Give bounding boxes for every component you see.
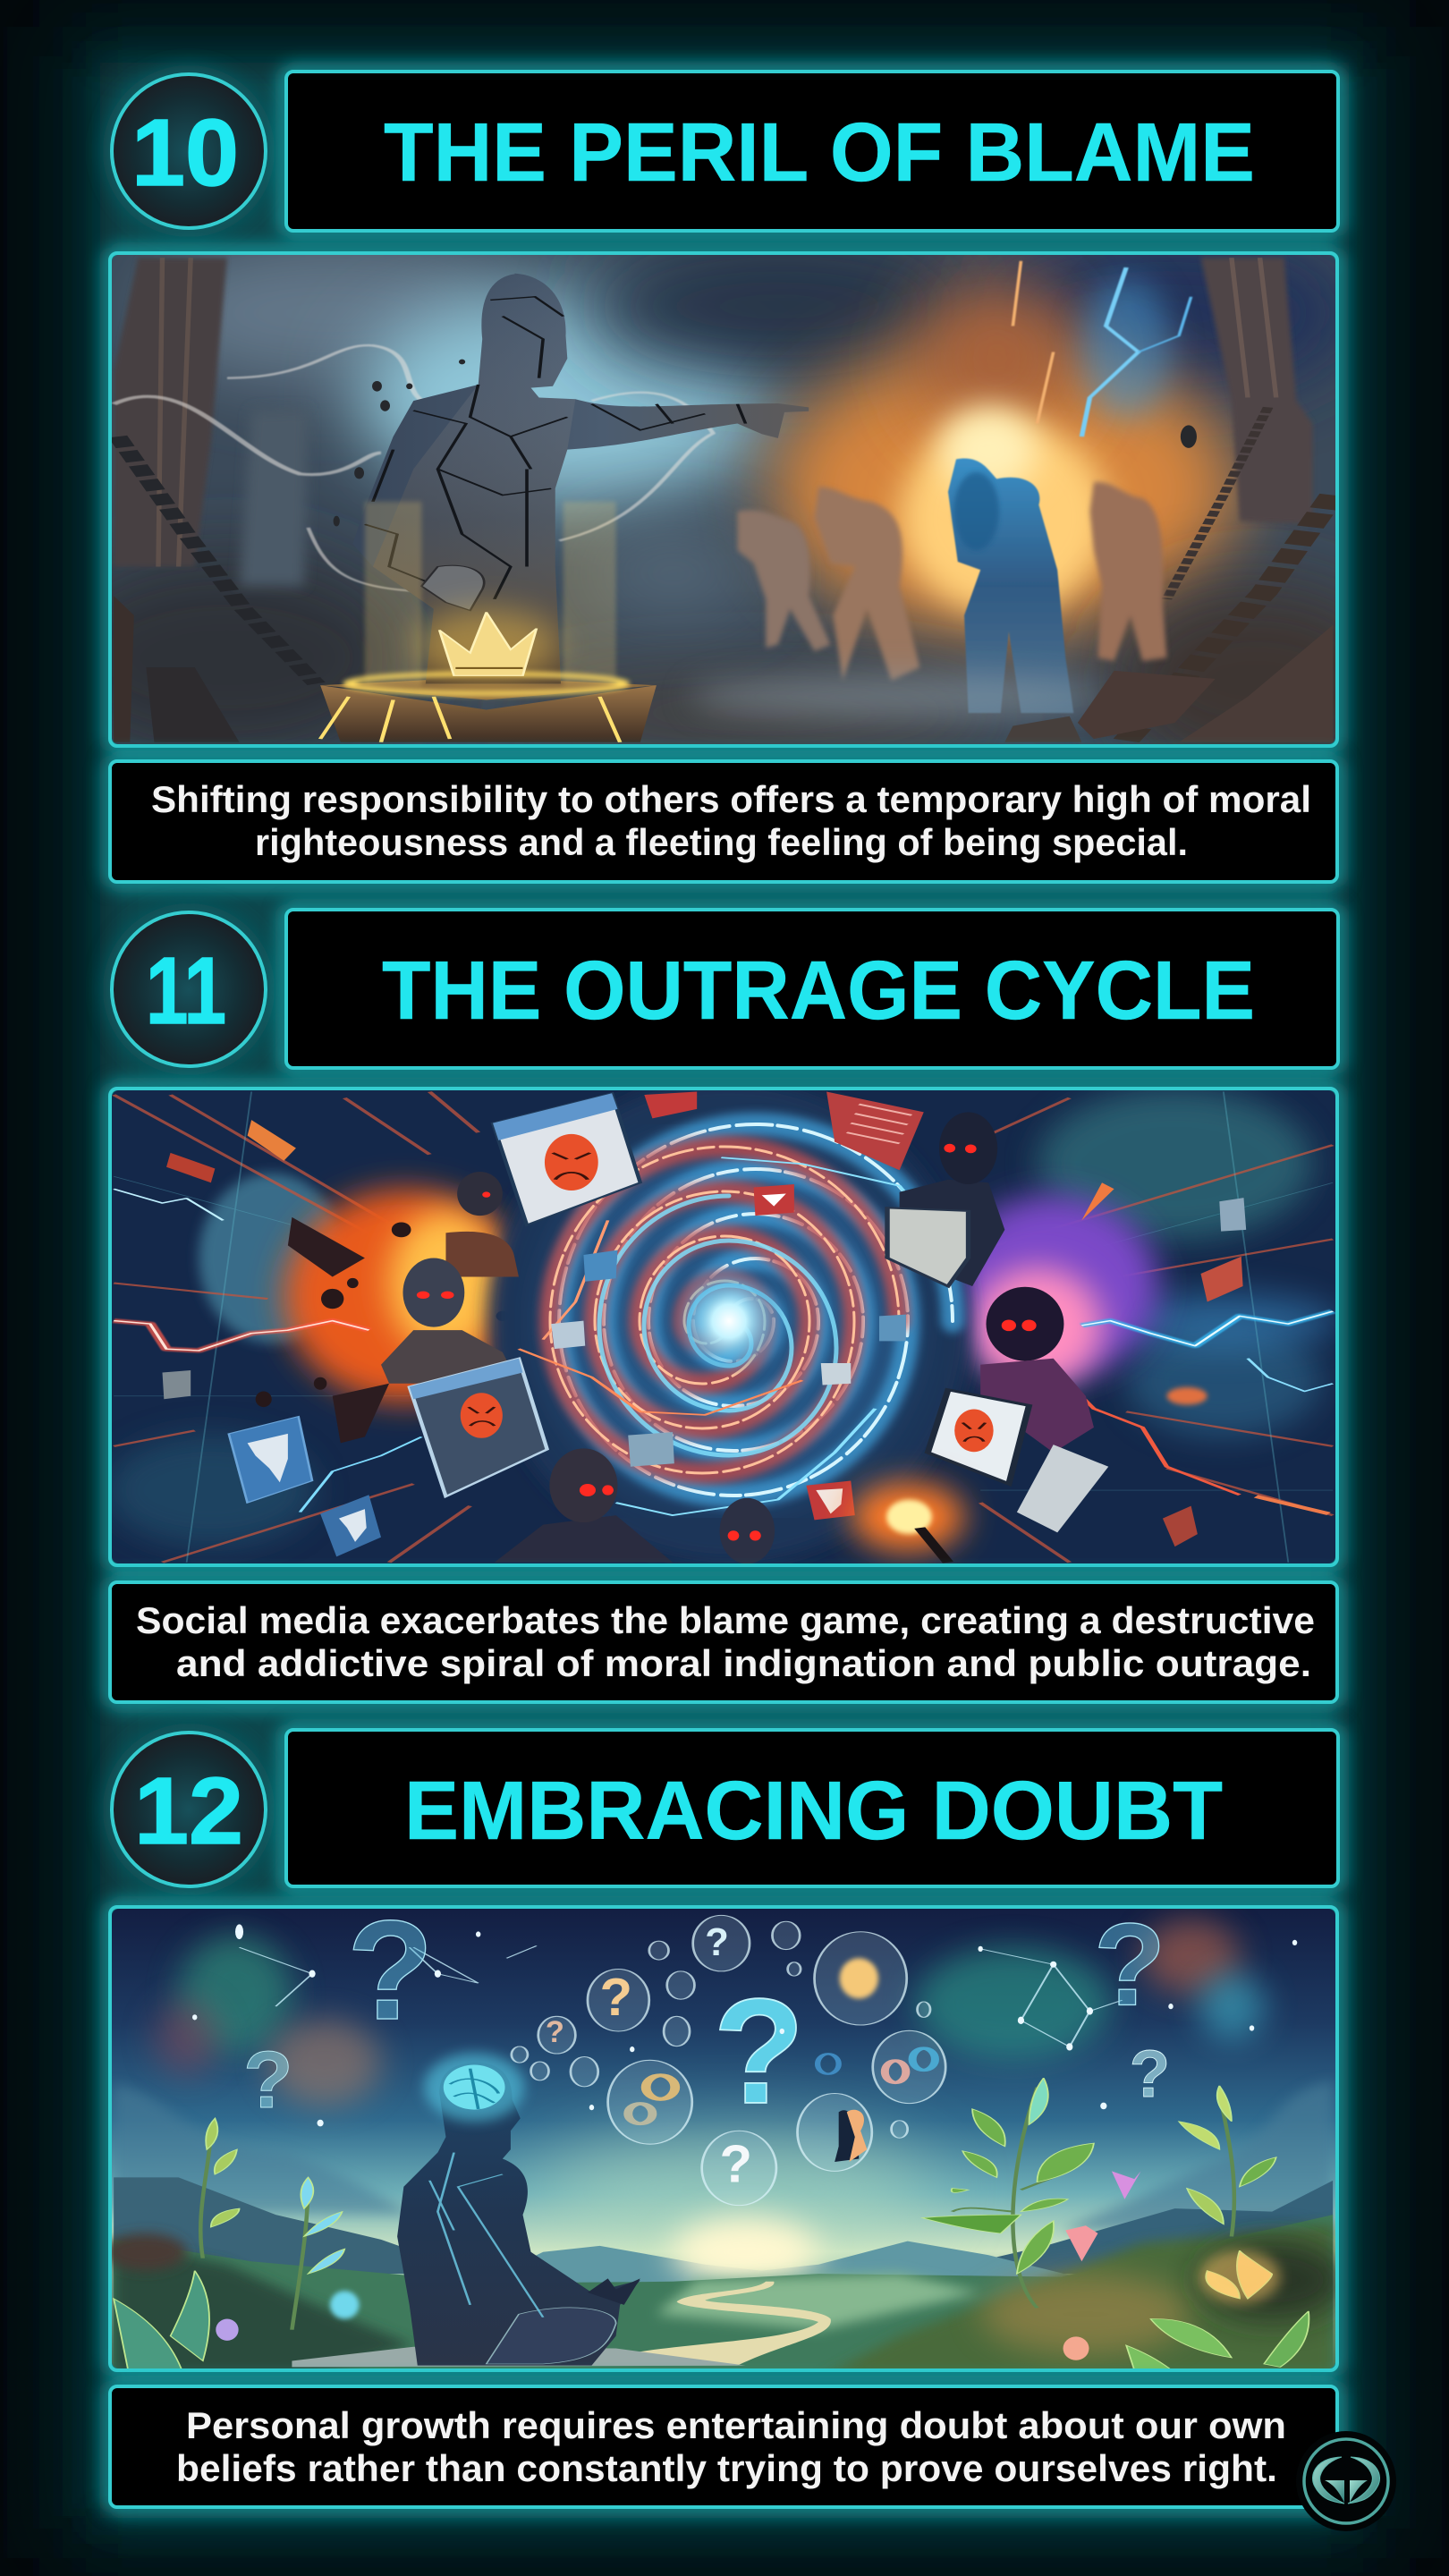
growing plants and flowers xyxy=(114,2078,1309,2379)
caption: righteousness and a fleeting feeling of being special. xyxy=(255,821,1188,863)
seated figure xyxy=(397,2053,640,2366)
wisps of smoke xyxy=(114,345,713,591)
illustration: stone figure pointing blame at cowering figures xyxy=(91,235,1356,760)
number badge 11: 11 xyxy=(146,938,226,1044)
bubble contents: ? xyxy=(546,2015,564,2049)
chains xyxy=(118,407,1333,741)
bubble contents: ? xyxy=(705,1921,729,1964)
bubble contents: ? xyxy=(243,2035,292,2125)
explosions xyxy=(256,1189,1158,1443)
number badge 11 xyxy=(103,903,275,1075)
bubble contents: ? xyxy=(1130,2037,1170,2111)
title bar xyxy=(286,910,1338,1068)
bubble contents: ? xyxy=(1094,1899,1165,2029)
section 12: embracing doubt xyxy=(89,1724,1360,2507)
title bar xyxy=(286,1730,1338,1886)
stars xyxy=(192,1924,1297,2126)
nebulae xyxy=(154,1919,1264,2252)
number badge 12 xyxy=(103,1724,275,1895)
cowering figures xyxy=(689,459,1166,719)
bubble contents: ? xyxy=(720,2134,752,2194)
browser windows with angry faces xyxy=(410,1092,1108,1532)
number badge 10 xyxy=(103,65,275,237)
meadow xyxy=(106,2215,1345,2379)
caption: Social media exacerbates the blame game, creating a destructive xyxy=(136,1599,1315,1641)
bubble contents: ? xyxy=(347,1891,434,2049)
winding path xyxy=(600,2282,831,2366)
title bar: EMBRACING DOUBT xyxy=(404,1764,1223,1857)
bubble contents xyxy=(243,1891,1170,2194)
angry silhouettes with red eyes xyxy=(381,1112,1094,1563)
pedestal with cracks of light xyxy=(320,677,657,742)
statue with cracked stone xyxy=(352,274,809,683)
thumbs-down icons and tiles xyxy=(163,1092,1246,1556)
illustration: meditating figure among question bubbles xyxy=(89,1891,1360,2388)
bubble contents: ? xyxy=(600,1967,632,2027)
title bar: THE PERIL OF BLAME xyxy=(384,106,1255,199)
background network and globes xyxy=(106,1089,1337,1563)
illustration: social media outrage spiral xyxy=(106,1080,1337,1565)
number badge 10: 10 xyxy=(131,100,239,206)
distant mountains xyxy=(114,2081,1333,2286)
blue lightning xyxy=(1013,261,1191,436)
title bar xyxy=(286,72,1338,231)
golden light and crown xyxy=(349,502,624,693)
caption xyxy=(110,1582,1337,1702)
caption: beliefs rather than constantly trying to prove ourselves right. xyxy=(176,2447,1277,2489)
number badge 12: 12 xyxy=(134,1758,243,1864)
caption: Shifting responsibility to others offers a temporary high of moral xyxy=(151,778,1311,820)
caption xyxy=(110,761,1337,882)
section 11: the outrage cycle xyxy=(103,903,1338,1702)
constellations xyxy=(240,1945,1123,2046)
question bubbles xyxy=(512,1915,945,2206)
title bar: THE OUTRAGE CYCLE xyxy=(382,944,1255,1037)
spark burst xyxy=(851,1482,964,1563)
bubble contents: ? xyxy=(713,1968,805,2135)
logo badge xyxy=(1296,2431,1396,2531)
ruined columns xyxy=(114,258,1312,586)
caption xyxy=(110,2386,1337,2507)
spiral vortex xyxy=(487,1080,970,1563)
rocks xyxy=(114,596,1333,742)
lightning bolts xyxy=(114,1157,1333,1515)
caption: Personal growth requires entertaining doubt about our own xyxy=(186,2404,1286,2446)
section 10: the peril of blame xyxy=(41,65,1402,882)
caption: and addictive spiral of moral indignation and public outrage. xyxy=(176,1642,1311,1684)
flying debris xyxy=(334,360,1197,526)
